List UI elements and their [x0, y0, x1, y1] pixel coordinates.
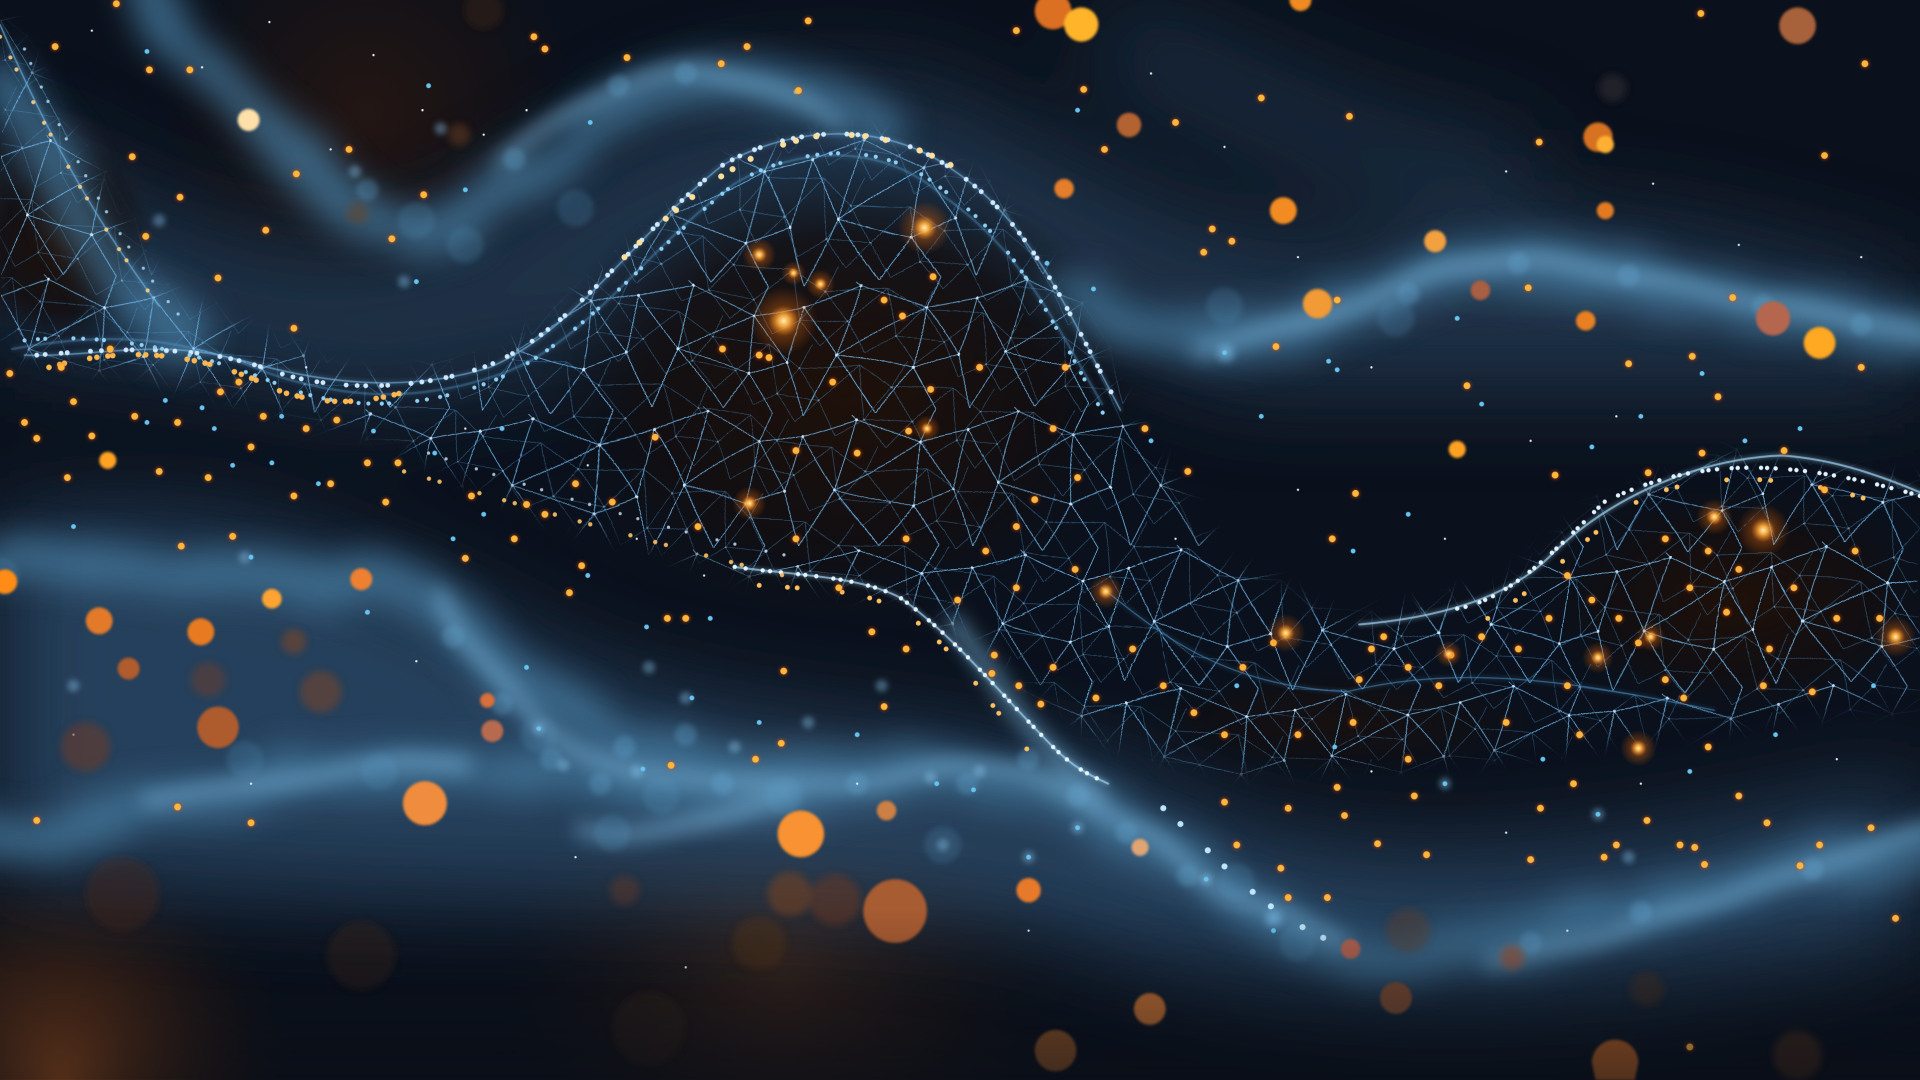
- neural mesh: [0, 14, 1920, 783]
- floor shading: [0, 909, 1920, 1080]
- small blue particles: [73, 51, 1873, 931]
- blue bokeh: [0, 73, 1861, 943]
- glowing ridge lines: [0, 24, 1920, 784]
- bright star nodes: [732, 201, 1916, 767]
- dark mesh interiors: [0, 141, 1920, 778]
